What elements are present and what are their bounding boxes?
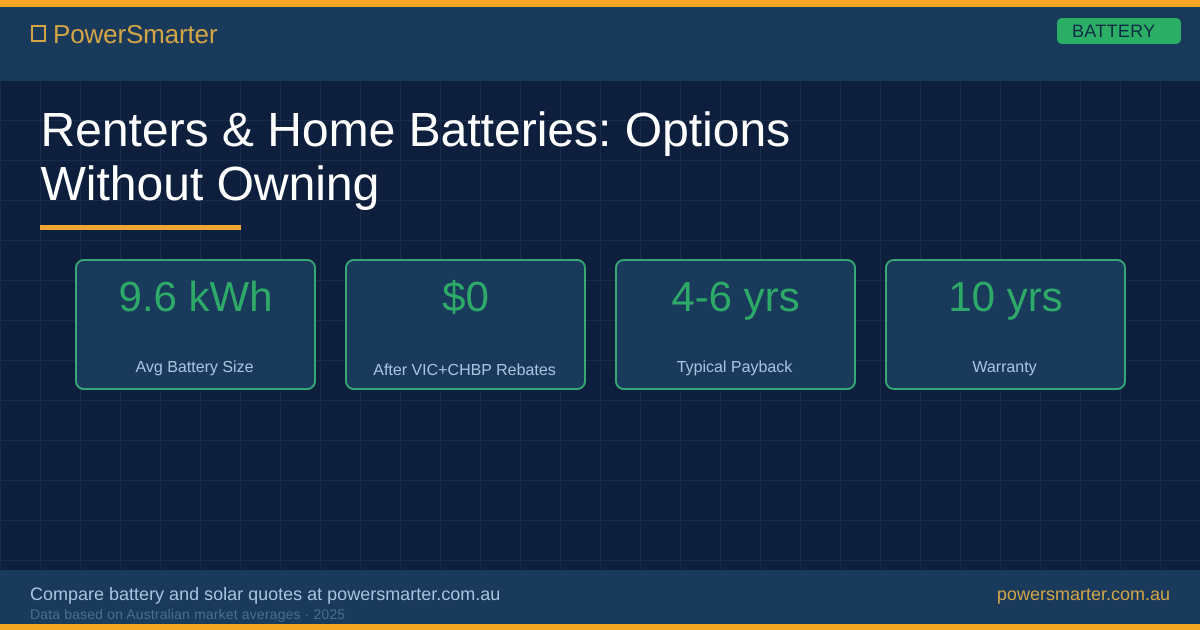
logo: PowerSmarter xyxy=(31,19,218,49)
data source note: Data based on Australian market averages · 2025 xyxy=(30,606,345,622)
stat card: battery size xyxy=(75,259,316,390)
bottom accent bar xyxy=(0,624,1200,630)
stat card: payback xyxy=(615,259,856,390)
label: After VIC+CHBP Rebates xyxy=(373,362,556,379)
brand name: PowerSmarter xyxy=(53,19,217,49)
label: Avg Battery Size xyxy=(136,359,253,376)
label: Typical Payback xyxy=(677,359,792,376)
value: $0 xyxy=(442,273,489,320)
footer site link: powersmarter.com.au xyxy=(997,584,1170,604)
stat card: warranty xyxy=(885,259,1126,390)
badge: BATTERY xyxy=(1057,18,1181,44)
stat card: rebates xyxy=(345,259,586,390)
icon: missing glyph box xyxy=(31,25,46,42)
value: 9.6 kWh xyxy=(118,273,273,320)
top accent bar xyxy=(0,0,1200,7)
title: Without Owning xyxy=(40,158,379,211)
title xyxy=(40,104,790,211)
label: Warranty xyxy=(972,359,1037,376)
value: 10 yrs xyxy=(948,273,1063,320)
title: Renters & Home Batteries: Options xyxy=(40,104,790,157)
value: 4-6 yrs xyxy=(671,273,800,320)
title underline xyxy=(40,225,241,230)
footer band xyxy=(0,570,1200,624)
footer call to action: Compare battery and solar quotes at powersmarter.com.au xyxy=(30,584,500,604)
header band xyxy=(0,7,1200,81)
badge: BATTERY: BATTERY xyxy=(1072,21,1155,41)
